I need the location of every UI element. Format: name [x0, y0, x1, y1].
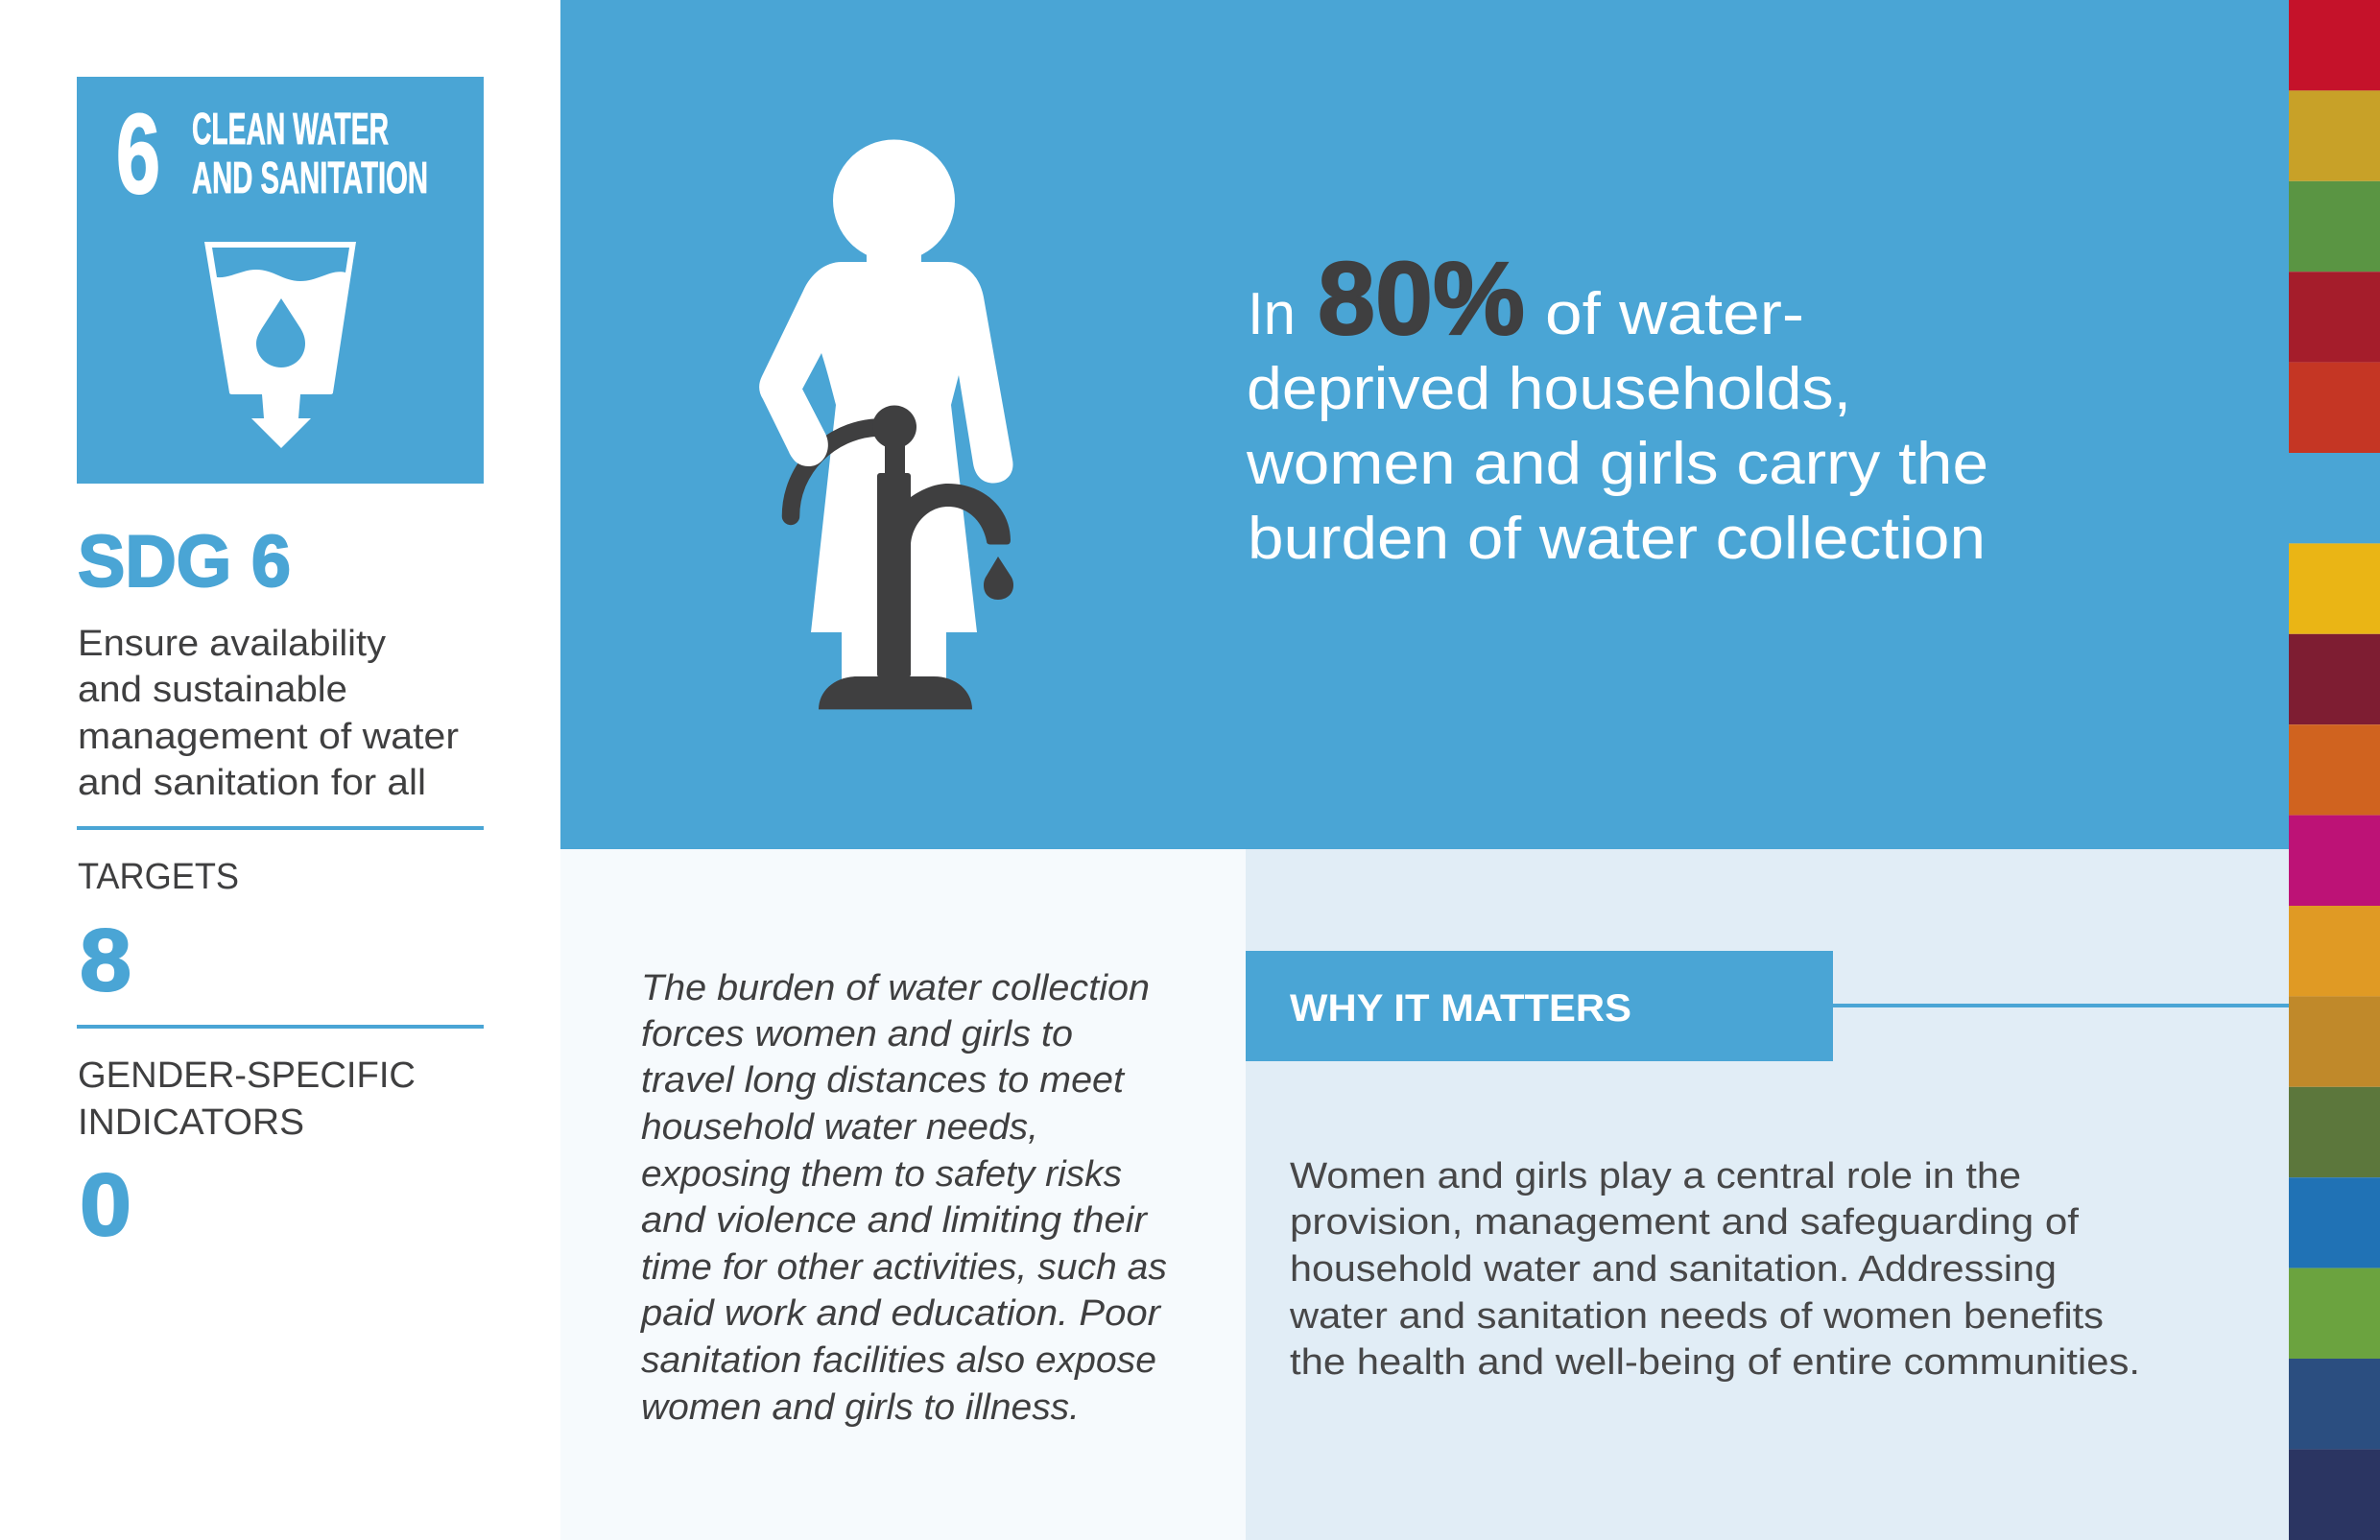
label: gender-specific indicators: GENDER-SPECIFIC — [78, 1055, 416, 1096]
panel: left sidebar — [77, 77, 484, 1254]
heading box: why it matters: WHY IT MATTERS — [1290, 987, 1631, 1030]
headline statistic — [1246, 240, 1988, 572]
headline statistic: deprived households, — [1247, 356, 1851, 422]
italic paragraph: forces women and girls to — [641, 1014, 1073, 1054]
panel: main blue banner — [560, 0, 2289, 849]
headline statistic: burden of water collection — [1248, 506, 1986, 572]
headline statistic: of water- — [1545, 281, 1804, 347]
italic paragraph: paid work and education. Poor — [640, 1293, 1161, 1334]
water pump — [791, 405, 1011, 709]
label: targets: TARGETS — [78, 857, 239, 897]
italic paragraph: travel long distances to meet — [641, 1060, 1125, 1101]
goal description: Ensure availability — [78, 624, 386, 664]
italic paragraph: and violence and limiting their — [641, 1200, 1148, 1241]
value: 0 indicators: 0 — [80, 1156, 131, 1254]
paragraph: why it matters: Women and girls play a central role in the — [1290, 1156, 2021, 1196]
goal description — [78, 624, 459, 803]
headline statistic: In — [1248, 281, 1296, 347]
goal description: and sustainable — [78, 670, 347, 710]
icon: woman at water pump — [759, 140, 1013, 709]
value: 8 targets: 8 — [80, 912, 131, 1009]
heading box: why it matters — [1246, 951, 1833, 1061]
panel: why it matters — [1246, 849, 2289, 1540]
heading: SDG 6: SDG 6 — [78, 521, 291, 603]
woman figure — [759, 140, 1012, 681]
badge number: 6 — [116, 91, 160, 218]
italic paragraph: women and girls to illness. — [641, 1387, 1080, 1428]
badge title: CLEAN WATER — [192, 104, 389, 154]
italic paragraph: exposing them to safety risks — [641, 1154, 1122, 1195]
paragraph: why it matters: household water and sanitation. Addressing — [1290, 1249, 2057, 1290]
colour stripe: 17 SDG goals — [2289, 0, 2380, 1540]
badge title: AND SANITATION — [192, 153, 428, 202]
headline statistic: women and girls carry the — [1246, 431, 1988, 497]
SDG 6 badge — [77, 77, 484, 484]
goal description: management of water — [78, 717, 459, 757]
label: gender-specific indicators: INDICATORS — [78, 1102, 304, 1143]
paragraph: why it matters: the health and well-being of entire communities. — [1290, 1342, 2140, 1383]
hand on pump handle — [773, 390, 828, 466]
badge title — [192, 104, 428, 202]
paragraph: why it matters: provision, management and safeguarding of — [1290, 1202, 2079, 1243]
icon: falling water drop — [984, 557, 1013, 600]
paragraph: why it matters: water and sanitation needs of women benefits — [1289, 1296, 2104, 1337]
label: gender-specific indicators — [78, 1055, 416, 1143]
italic paragraph: household water needs, — [641, 1107, 1038, 1148]
highlighted 80%: 80% — [1318, 240, 1525, 356]
italic paragraph: sanitation facilities also expose — [641, 1340, 1156, 1381]
italic paragraph — [640, 968, 1167, 1428]
italic paragraph: The burden of water collection — [641, 968, 1150, 1008]
paragraph: why it matters — [1289, 1156, 2140, 1383]
icon: water glass with drop and arrow — [204, 242, 356, 448]
italic paragraph: time for other activities, such as — [641, 1247, 1167, 1288]
goal description: and sanitation for all — [78, 763, 426, 803]
panel: burden text — [560, 849, 1246, 1540]
